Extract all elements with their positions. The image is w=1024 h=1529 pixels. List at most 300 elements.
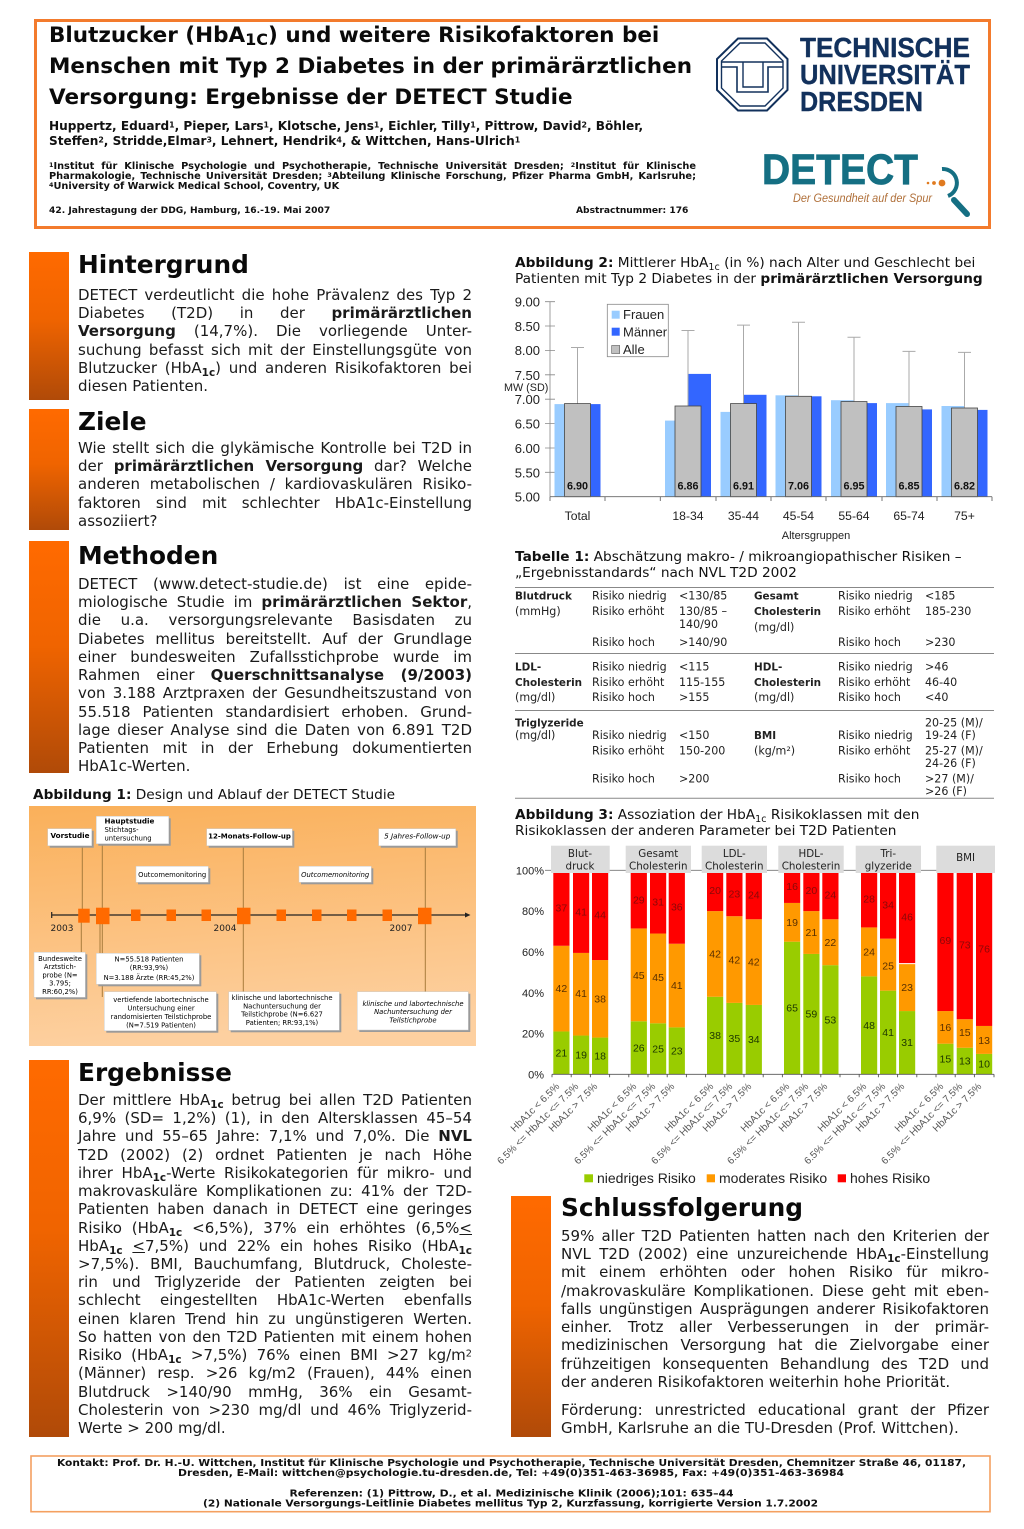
y axis labels: 20% xyxy=(522,1028,544,1040)
row: Blutdruck und Gesamtcholesterin: Risiko hoch xyxy=(838,636,901,649)
y axis: 6.00 xyxy=(515,441,540,456)
box: klinische Nachuntersuchung 2007: Nachuntersuchung der xyxy=(374,1008,453,1016)
footer: Kontakt und Referenzen: Referenzen: (1) Pittrow, D., et al. Medizinische Klinik (2006);101: 635–44 xyxy=(290,1488,734,1500)
box: Vorstudie: Vorstudie xyxy=(50,831,90,840)
value labels: niedriges Risiko: 35 xyxy=(729,1033,740,1045)
text block: Jahre und 55–65 Jahre: 7,1% und 7,0%. Die NVL xyxy=(78,1127,472,1145)
value labels: niedriges Risiko: 18 xyxy=(594,1050,606,1062)
text block: HbA1c-Werten. xyxy=(78,757,190,775)
text block: Förderung: GmbH, Karlsruhe an die TU-Dresden (Prof. Wittchen). xyxy=(561,1419,959,1437)
row: Triglyzeride und BMI: >26 (F) xyxy=(925,785,967,798)
value labels: hohes Risiko: 36 xyxy=(671,902,683,914)
text block: >7,5%). BMI, Bauchumfang, Blutdruck, Choleste- xyxy=(78,1255,472,1273)
icon: orange side bar xyxy=(29,1060,69,1437)
value labels: hohes Risiko: 24 xyxy=(825,889,836,901)
row: LDL und HDL: (mg/dl) xyxy=(754,691,794,704)
row: Blutdruck und Gesamtcholesterin: Risiko erhöht xyxy=(592,605,665,618)
heading: Abbildung 3: Risikoklassen der anderen Parameter bei T2D Patienten xyxy=(515,823,896,839)
value labels: niedriges Risiko: 26 xyxy=(633,1042,645,1054)
box: Bundesweite Arztstichprobe: Arztstich- xyxy=(44,963,77,971)
value labels: niedriges Risiko: 13 xyxy=(959,1056,971,1068)
x axis rotated labels: 6.5% <= HbA1c <= 7.5% xyxy=(880,1081,965,1167)
authors xyxy=(49,119,643,148)
text block: Fazit: falls ungünstigen Ausprägungen anderer Risikofaktoren xyxy=(561,1300,989,1318)
value labels: moderates Risiko: 45 xyxy=(652,972,664,984)
group header: Blutdruck: Blut- xyxy=(568,848,592,860)
value labels: 6.95 xyxy=(843,480,865,492)
y axis labels: 80% xyxy=(522,906,544,918)
value labels: niedriges Risiko: 59 xyxy=(806,1009,817,1021)
chart: Abbildung 3 stacked bars xyxy=(496,846,995,1186)
text block: HbA1c <7,5%) und 22% ein hohes Risiko (HbA1c xyxy=(78,1237,472,1257)
row: LDL und HDL: >155 xyxy=(679,691,709,704)
box: 12-Monats-Follow-up: 12-Monats-Follow-up xyxy=(208,832,291,840)
value labels: hohes Risiko: 34 xyxy=(882,900,894,912)
box: Bundesweite Arztstichprobe: RR:60,2%) xyxy=(42,988,78,996)
x axis rotated labels: HbA1c < 6.5% xyxy=(816,1081,869,1135)
text block: Fazit: 59% aller T2D Patienten hatten nach den Kriterien der xyxy=(561,1227,989,1245)
value labels: niedriges Risiko: 34 xyxy=(748,1034,760,1046)
text block: Fazit: mit einem erhöhten oder hohen Risiko für mikro- xyxy=(561,1263,989,1281)
table: Risikoklassen xyxy=(515,587,994,799)
heading: Ziele xyxy=(78,407,147,436)
heading: Ergebnisse xyxy=(78,1058,232,1087)
bars: Alle xyxy=(564,396,978,497)
box: Hauptstudie: Hauptstudie xyxy=(104,816,155,826)
text block: lage dieser Analyse sind die Daten von 6.891 T2D xyxy=(78,721,472,739)
panel: Schlussfolgerung xyxy=(511,1193,990,1437)
text block: von 3.188 Arztpraxen der Gesundheitszustand von xyxy=(78,684,472,702)
value labels: moderates Risiko: 41 xyxy=(575,988,587,1000)
value labels: 6.91 xyxy=(733,480,754,492)
text block: 55.518 Patienten standardisiert erhoben. Grund- xyxy=(78,703,472,721)
year labels: 2004 xyxy=(214,924,237,934)
text block: So hatten von den T2D Patienten mit einem hohen xyxy=(78,1328,472,1346)
group header: LDL-Cholesterin: Cholesterin xyxy=(705,860,764,872)
text block: Fazit: frühzeitigen konsequenten Behandlung des T2D und xyxy=(561,1355,989,1373)
value labels: hohes Risiko: 23 xyxy=(729,888,740,900)
text block: suchung befasst sich mit der Einstellungsgüte von xyxy=(78,341,472,359)
title: Menschen mit Typ 2 Diabetes in der primärärztlichen xyxy=(49,54,692,79)
value labels: hohes Risiko: 24 xyxy=(748,889,760,901)
y axis: 6.50 xyxy=(515,416,540,432)
value labels: moderates Risiko: 41 xyxy=(671,980,683,992)
text block: Diabetes mellitus bereitstellt. Auf der Grundlage xyxy=(78,630,472,648)
box: Vorstudie xyxy=(48,829,92,846)
text block: Blutzucker (HbA1c) und anderen Risikofaktoren bei xyxy=(78,359,472,379)
x axis rotated labels: HbA1c > 7.5% xyxy=(931,1081,984,1135)
box: Patienten und Ärzte: (RR:93,9%) xyxy=(130,964,169,972)
row: LDL und HDL: Risiko niedrig xyxy=(838,660,913,674)
text block: Werte > 200 mg/dl. xyxy=(78,1419,226,1437)
y axis labels: 100% xyxy=(516,866,544,878)
text block: Förderung xyxy=(561,1401,990,1437)
group header: LDL-Cholesterin xyxy=(702,846,767,873)
box: vertiefende Untersuchung xyxy=(104,992,216,1031)
group header: LDL-Cholesterin: LDL- xyxy=(723,848,746,860)
row: LDL und HDL xyxy=(515,660,957,704)
value labels: moderates Risiko: 19 xyxy=(786,917,798,929)
value labels: hohes Risiko: 76 xyxy=(978,943,990,955)
row: Blutdruck und Gesamtcholesterin: Gesamt xyxy=(754,590,799,602)
row: Blutdruck und Gesamtcholesterin xyxy=(515,590,971,649)
text block: Fazit: der anderen Risikofaktoren weiterhin hohe Priorität. xyxy=(561,1373,950,1391)
row: Triglyzeride und BMI: Risiko erhöht xyxy=(838,744,911,758)
row: Triglyzeride und BMI: Risiko hoch xyxy=(592,772,655,786)
row: LDL und HDL: <40 xyxy=(925,691,948,704)
row: LDL und HDL: Cholesterin xyxy=(754,677,821,689)
value labels: hohes Risiko: 16 xyxy=(786,881,798,893)
row: Blutdruck und Gesamtcholesterin: >230 xyxy=(925,636,955,649)
text block: Fazit: medizinischen Versorgung hat die Zielvorgabe einer xyxy=(561,1336,989,1354)
row: Blutdruck und Gesamtcholesterin: <130/85 xyxy=(679,590,727,602)
value labels: moderates Risiko: 23 xyxy=(901,982,913,994)
legend: Männer xyxy=(623,324,668,340)
text block: Risiko (HbA1c >7,5%) 76% einen BMI >27 kg/m2 xyxy=(78,1346,472,1366)
text block: Fazit: NVL T2D (2002) eine unzureichende HbA1c-Einstellung xyxy=(561,1245,989,1265)
group header: BMI xyxy=(936,846,995,873)
y axis: 7.00 xyxy=(515,392,540,407)
heading: Abbildung 2: Patienten mit Typ 2 Diabetes in der primärärztlichen Versorgung xyxy=(515,271,983,287)
box: 12-Monats-Follow-up xyxy=(207,829,292,846)
box: Outcomemonitoring 1: Outcomemonitoring xyxy=(138,871,206,879)
value labels: niedriges Risiko: 53 xyxy=(825,1015,836,1027)
text block: der primärärztlichen Versorgung dar? Welche xyxy=(78,457,472,475)
logo: TU Dresden: DRESDEN xyxy=(800,86,923,117)
row: Triglyzeride und BMI: BMI xyxy=(754,730,776,742)
box: Patienten und Ärzte: N=55.518 Patienten xyxy=(115,956,183,964)
box: klinische Nachuntersuchung 2007: Teilstichprobe xyxy=(389,1016,437,1024)
box: klinische Nachuntersuchung 2004: Patienten; RR:93,1%) xyxy=(246,1019,319,1027)
value labels: 6.85 xyxy=(898,480,920,492)
box: Hauptstudie: Stichtags- xyxy=(104,826,139,834)
group header: Gesamt Cholesterin: Gesamt xyxy=(638,848,678,860)
value labels: hohes Risiko: 29 xyxy=(633,894,645,906)
text block: einen klaren Trend hin zu ungünstigeren Werten. xyxy=(78,1310,472,1328)
authors: Huppertz, Eduard1, Pieper, Lars1, Klotsche, Jens1, Eichler, Tilly1, Pittrow, David2, Böhler, xyxy=(49,119,643,133)
text block: miologische Studie im primärärztlichen Sektor, xyxy=(78,593,472,611)
group header: Gesamt Cholesterin xyxy=(626,846,691,873)
text block xyxy=(78,286,472,395)
text block: Risiko (HbA1c <6,5%), 37% ein erhöhtes (6,5%< xyxy=(78,1219,472,1239)
box: klinische Nachuntersuchung 2007: klinische und labortechnische xyxy=(362,1000,464,1008)
x axis: 45-54 xyxy=(783,509,814,523)
x axis: Total xyxy=(565,509,590,523)
x axis xyxy=(550,497,992,542)
row: Triglyzeride und BMI: >200 xyxy=(679,772,709,786)
group header: Blutdruck xyxy=(551,846,610,873)
row: Triglyzeride und BMI: 24-26 (F) xyxy=(925,757,976,770)
row: LDL und HDL: (mg/dl) xyxy=(515,691,555,704)
logo: DETECT: DETECT xyxy=(762,146,918,194)
group header: HDL-Cholesterin: HDL- xyxy=(799,848,824,860)
value labels: niedriges Risiko: 38 xyxy=(709,1030,721,1042)
heading: Abbildung 1: Abbildung 1: Design und Ablauf der DETECT Studie xyxy=(33,787,395,803)
value labels: hohes Risiko: 20 xyxy=(806,885,817,897)
logo: TU Dresden: TECHNISCHE xyxy=(800,32,970,63)
y axis xyxy=(504,294,555,504)
value labels: niedriges Risiko xyxy=(556,1002,990,1071)
x axis rotated labels: 6.5% <= HbA1c <= 7.5% xyxy=(803,1081,888,1167)
logo: DETECT xyxy=(762,146,970,217)
text block: T2D (2002) (2) ordnet Patienten je nach Höhe xyxy=(78,1146,472,1164)
text block xyxy=(77,1091,472,1437)
value labels: hohes Risiko: 46 xyxy=(901,912,913,924)
row: Blutdruck und Gesamtcholesterin: Risiko niedrig xyxy=(838,590,913,602)
value labels: moderates Risiko: 42 xyxy=(729,955,740,967)
value labels: niedriges Risiko: 15 xyxy=(940,1054,951,1066)
value labels: hohes Risiko: 37 xyxy=(556,902,567,914)
text block: 6,9% (SD= 1,2%) (1), in den Altersklassen 45–54 xyxy=(78,1109,472,1127)
title xyxy=(49,23,692,110)
legend xyxy=(607,304,668,357)
value labels: hohes Risiko: 73 xyxy=(959,939,971,951)
legend: moderates Risiko xyxy=(719,1170,827,1186)
row: Blutdruck und Gesamtcholesterin: Risiko niedrig xyxy=(592,590,667,602)
row: Blutdruck und Gesamtcholesterin: Risiko hoch xyxy=(592,636,655,649)
value labels: hohes Risiko: 69 xyxy=(940,935,951,947)
heading: Methoden xyxy=(78,541,218,570)
value labels xyxy=(567,480,975,492)
heading: Tabelle 1 xyxy=(515,549,962,581)
chart: Abbildung 2 bar chart xyxy=(504,295,992,542)
x axis rotated labels: HbA1c < 6.5% xyxy=(739,1081,792,1135)
logo: DETECT: Der Gesundheit auf der Spur xyxy=(793,193,933,205)
row: LDL und HDL: Risiko niedrig xyxy=(592,660,667,674)
y axis labels: 0% xyxy=(528,1070,544,1082)
box: vertiefende Untersuchung: randomisierten Teilstichprobe xyxy=(111,1013,211,1021)
footer: Kontakt und Referenzen xyxy=(30,1455,991,1512)
y axis: 8.00 xyxy=(515,343,540,358)
legend: niedriges Risiko xyxy=(597,1170,696,1186)
heading: Tabelle 1: Tabelle 1: Abschätzung makro- / mikroangiopathischer Risiken – xyxy=(515,549,962,565)
text block: Patienten mit in der Erhebung dokumentierten xyxy=(78,739,472,757)
icon: orange side bar xyxy=(29,252,69,400)
heading: Abbildung 2: Abbildung 2: Mittlerer HbA1c (in %) nach Alter und Geschlecht bei xyxy=(515,255,975,273)
bars: Männer xyxy=(578,374,988,497)
x axis rotated labels: 6.5% <= HbA1c <= 7.5% xyxy=(496,1081,581,1167)
text block: Der mittlere HbA1c betrug bei allen T2D Patienten xyxy=(78,1091,472,1111)
row: LDL und HDL: 115-155 xyxy=(679,676,725,689)
x axis rotated labels: 6.5% <= HbA1c <= 7.5% xyxy=(650,1081,735,1167)
text block: einer bundesweiten Zufallsstichprobe wurde im xyxy=(78,648,472,666)
text block: Fazit: einher. Trotz aller Verbesserungen in der primär- xyxy=(561,1318,989,1336)
timeline arrow xyxy=(52,912,470,918)
box: 5 Jahres-Follow-up xyxy=(379,829,456,846)
value labels: hohes Risiko xyxy=(556,881,990,955)
row: Triglyzeride und BMI xyxy=(515,716,983,798)
text block: Wie stellt sich die glykämische Kontrolle bei T2D in xyxy=(78,439,472,457)
series: moderates Risiko xyxy=(553,903,992,1054)
value labels: niedriges Risiko: 21 xyxy=(556,1047,567,1059)
y axis: MW (SD) xyxy=(504,382,548,394)
row: Triglyzeride und BMI: <150 xyxy=(679,729,709,742)
box: Outcomemonitoring 2 xyxy=(299,866,371,882)
heading: Abbildung 3 xyxy=(515,807,919,839)
text block: Förderung: Förderung: unrestricted educational grant der Pfizer xyxy=(561,1401,989,1419)
box: vertiefende Untersuchung: vertiefende labortechnische xyxy=(113,996,209,1004)
year labels xyxy=(51,924,412,934)
value labels: 7.06 xyxy=(788,480,809,492)
box shadows xyxy=(36,818,470,1033)
panel: Ergebnisse xyxy=(29,1058,472,1437)
x axis rotated labels: HbA1c < 6.5% xyxy=(586,1081,639,1135)
x axis rotated labels: 6.5% <= HbA1c <= 7.5% xyxy=(573,1081,658,1167)
value labels: 6.90 xyxy=(567,480,588,492)
row: LDL und HDL: 46-40 xyxy=(925,676,957,689)
box: Outcomemonitoring 1 xyxy=(136,866,208,882)
value labels: niedriges Risiko: 65 xyxy=(786,1002,798,1014)
error bars xyxy=(571,322,971,408)
box: 5 Jahres-Follow-up: 5 Jahres-Follow-up xyxy=(384,832,451,840)
row: Triglyzeride und BMI: 20-25 (M)/ xyxy=(925,716,983,730)
text block: Blutdruck >140/90 mmHg, 36% ein Gesamt- xyxy=(78,1382,472,1400)
value labels: niedriges Risiko: 25 xyxy=(652,1043,664,1055)
group header: Triglyzeride: Tri- xyxy=(880,848,896,860)
value labels: 6.86 xyxy=(677,480,699,492)
group header: BMI: BMI xyxy=(956,852,975,864)
legend: hohes Risiko xyxy=(850,1170,930,1186)
value labels: moderates Risiko: 45 xyxy=(633,970,645,982)
row: Triglyzeride und BMI: >27 (M)/ xyxy=(925,772,974,786)
x axis xyxy=(552,1074,994,1077)
heading: Schlussfolgerung xyxy=(561,1193,803,1222)
header panel xyxy=(34,19,991,229)
group header: Triglyzeride: glyzeride xyxy=(865,860,912,872)
text block: DETECT verdeutlicht die hohe Prävalenz des Typ 2 xyxy=(78,286,472,304)
row: LDL und HDL: Cholesterin xyxy=(515,677,582,689)
text block: Rahmen einer Querschnittsanalyse (9/2003) xyxy=(78,666,472,684)
value labels: hohes Risiko: 41 xyxy=(575,907,587,919)
row: Blutdruck und Gesamtcholesterin: >140/90 xyxy=(679,636,727,649)
group header: HDL-Cholesterin: Cholesterin xyxy=(782,860,840,872)
text block: Fazit: /makrovaskuläre Komplikationen. Diese geht mit eben- xyxy=(561,1282,989,1300)
heading: Abbildung 3: Abbildung 3: Assoziation der HbA1c Risikoklassen mit den xyxy=(515,807,919,825)
text block: die u.a. versorgungsrelevante Basisdaten zu xyxy=(78,611,472,629)
row: Triglyzeride und BMI: Risiko hoch xyxy=(838,772,901,786)
heading: Abbildung 2 xyxy=(515,255,983,287)
icon: orange side bar xyxy=(29,409,69,530)
y axis labels: 60% xyxy=(522,947,544,959)
group header: Triglyzeride xyxy=(856,846,921,873)
stacked bars xyxy=(553,870,992,1074)
value labels: niedriges Risiko: 23 xyxy=(671,1045,683,1057)
affiliations xyxy=(49,161,696,192)
value labels: niedriges Risiko: 48 xyxy=(863,1020,875,1032)
affiliations: Pharmakologie, Technische Universität Dresden; 3Abteilung Klinische Forschung, Pfizer Pharma GmbH, Karlsruhe; xyxy=(49,171,696,182)
value labels: moderates Risiko xyxy=(556,917,990,1047)
text block: Patienten haben danach in DETECT eine geringes xyxy=(78,1200,472,1218)
row: LDL und HDL: Risiko erhöht xyxy=(592,676,665,689)
row: Blutdruck und Gesamtcholesterin: Risiko erhöht xyxy=(838,605,911,618)
conference line: Abstractnummer: 176 xyxy=(576,206,688,216)
group header: Gesamt Cholesterin: Cholesterin xyxy=(629,860,688,872)
value labels: niedriges Risiko: 10 xyxy=(978,1059,990,1071)
value labels: niedriges Risiko: 31 xyxy=(901,1037,913,1049)
footer: Kontakt und Referenzen: (2) Nationale Versorgungs-Leitlinie Diabetes mellitus Typ 2, Kurzfassung, korrigierte Version 1.7.2002 xyxy=(203,1498,818,1510)
x axis: 18-34 xyxy=(672,509,704,523)
y axis: 8.50 xyxy=(515,319,540,334)
text block: Versorgung (14,7%). Die vorliegende Unter- xyxy=(78,322,472,340)
text block: DETECT (www.detect-studie.de) ist eine epide- xyxy=(78,575,472,593)
text block: anderen metabolischen / kardiovaskulären Risiko- xyxy=(78,475,472,493)
row: LDL und HDL: Risiko erhöht xyxy=(838,676,911,689)
value labels: moderates Risiko: 42 xyxy=(709,948,721,960)
text block xyxy=(78,439,472,530)
value labels: moderates Risiko: 22 xyxy=(825,937,836,949)
value labels: moderates Risiko: 13 xyxy=(978,1035,990,1047)
box: Bundesweite Arztstichprobe: probe (N= xyxy=(42,971,78,979)
box: vertiefende Untersuchung: (N=7.519 Patienten) xyxy=(126,1022,196,1030)
group header: HDL-Cholesterin xyxy=(778,846,844,873)
row: LDL und HDL: Risiko hoch xyxy=(838,691,901,704)
box: Bundesweite Arztstichprobe: 3.795; xyxy=(49,980,71,988)
box: Hauptstudie xyxy=(96,816,169,844)
icon: orange side bar xyxy=(29,541,69,773)
row: Triglyzeride und BMI: (kg/m²) xyxy=(754,744,795,758)
box: Patienten und Ärzte: N=3.188 Ärzte (RR:45,2%) xyxy=(104,973,195,982)
box: klinische Nachuntersuchung 2004: klinische und labortechnische xyxy=(231,994,333,1002)
value labels: hohes Risiko: 44 xyxy=(594,910,606,922)
title: Versorgung: Ergebnisse der DETECT Studie xyxy=(49,85,573,110)
text block: Cholesterin von >230 mg/dl und 46% Triglyzerid- xyxy=(78,1401,472,1419)
value labels: moderates Risiko: 38 xyxy=(594,993,606,1005)
box: Hauptstudie: untersuchung xyxy=(104,834,152,842)
year labels: 2003 xyxy=(51,924,73,934)
row: Triglyzeride und BMI: Triglyzeride xyxy=(515,718,584,730)
row: Blutdruck und Gesamtcholesterin: 130/85 – xyxy=(679,605,727,618)
title: Blutzucker (HbA1C) und weitere Risikofaktoren bei xyxy=(49,23,659,49)
x axis: 75+ xyxy=(954,509,975,523)
logo: TU Dresden xyxy=(716,32,970,117)
row: Blutdruck und Gesamtcholesterin: Cholesterin xyxy=(754,606,821,618)
value labels: moderates Risiko: 21 xyxy=(806,927,817,939)
x axis rotated labels: 6.5% <= HbA1c <= 7.5% xyxy=(726,1081,811,1167)
heading: Hintergrund xyxy=(78,250,249,279)
row: Blutdruck und Gesamtcholesterin: <185 xyxy=(925,590,955,602)
row: Blutdruck und Gesamtcholesterin: (mg/dl) xyxy=(754,621,794,634)
x axis rotated labels: HbA1c > 7.5% xyxy=(777,1081,830,1135)
y axis: 7.50 xyxy=(515,368,540,383)
x axis rotated labels xyxy=(496,1081,984,1167)
icon: orange side bar xyxy=(511,1196,551,1437)
series: niedriges Risiko xyxy=(553,942,992,1074)
panel: Methoden xyxy=(29,541,472,775)
y axis: 5.00 xyxy=(515,490,540,504)
value labels: moderates Risiko: 42 xyxy=(748,957,760,969)
panel: Ziele xyxy=(29,407,472,530)
row: Triglyzeride und BMI: Risiko niedrig xyxy=(838,729,913,742)
x axis rotated labels: HbA1c > 7.5% xyxy=(624,1081,677,1135)
box: klinische Nachuntersuchung 2004: Teilstichprobe (N=6.627 xyxy=(240,1010,323,1018)
legend: Frauen xyxy=(623,307,664,322)
box: Bundesweite Arztstichprobe: Bundesweite xyxy=(38,955,82,963)
row: Triglyzeride und BMI: (mg/dl) xyxy=(515,729,555,742)
text block: Fazit xyxy=(561,1227,990,1391)
heading: Tabelle 1: „Ergebnisstandards“ nach NVL T2D 2002 xyxy=(515,565,797,581)
x axis: Altersgruppen xyxy=(782,530,850,542)
x axis rotated labels: HbA1c < 6.5% xyxy=(663,1081,716,1135)
row: LDL und HDL: >46 xyxy=(925,660,948,674)
row: LDL und HDL: Risiko hoch xyxy=(592,691,655,704)
row: Triglyzeride und BMI: Risiko erhöht xyxy=(592,744,665,758)
timeline markers xyxy=(78,908,431,924)
authors: Steffen2, Stridde,Elmar3, Lehnert, Hendrik4, & Wittchen, Hans-Ulrich1 xyxy=(49,134,520,148)
conference line xyxy=(49,206,688,216)
row: LDL und HDL: <115 xyxy=(679,660,709,674)
x axis rotated labels: HbA1c > 7.5% xyxy=(854,1081,907,1135)
text block: Diabetes (T2D) in der primärärztlichen xyxy=(78,304,472,322)
